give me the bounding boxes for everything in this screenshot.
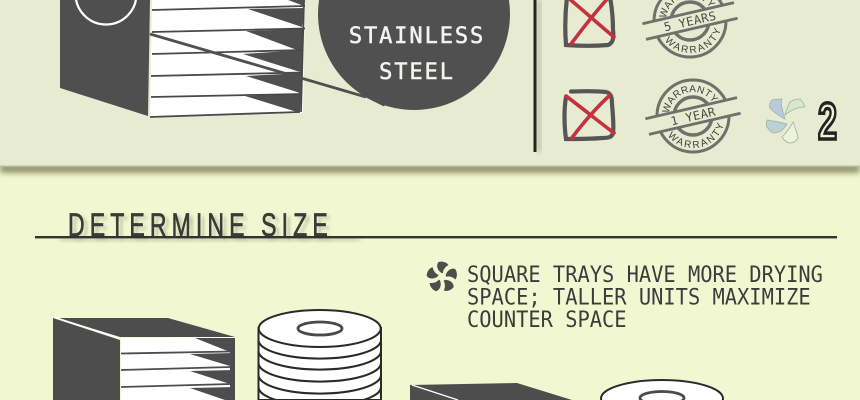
icon: warranty stamp 5 years [642,0,738,58]
icon: crossed checkbox, five year row [565,0,614,46]
icon: warranty stamp 5 years: WARRANTY [666,28,720,54]
heading: determine size [35,207,837,246]
icon: pastel fan [766,99,805,143]
icon: warranty stamp 1 year: 1 YEAR [669,104,717,128]
icon: short square dehydrator [410,383,572,400]
divider: vertical rule [534,0,541,152]
callout: aluminum vs stainless steel bubble: STAINLESS [349,24,485,49]
icon: tall round dehydrator [258,310,381,400]
icon: warranty stamp 1 year [645,78,741,154]
heading: determine size: DETERMINE SIZE [72,210,337,246]
text block: tray shape advice: SQUARE TRAYS HAVE MORE DRYING [467,262,823,288]
icon: warranty stamp 1 year: WARRANTY [668,122,723,148]
number: 2: 2 [818,93,837,151]
text block: tray shape advice [467,262,823,333]
icon: short round dehydrator [601,380,723,400]
icon: warranty stamp 5 years: 5 YEARS [663,9,718,34]
heading: determine size: DETERMINE SIZE [68,207,333,243]
icon: crossed checkbox, one year row [564,91,614,139]
text block: tray shape advice: COUNTER SPACE [467,307,627,333]
icon: tray dehydrator with round door [60,0,305,118]
icon: dark fan bullet [426,262,459,293]
text block: tray shape advice: SPACE; TALLER UNITS MAXIMIZE [467,285,811,311]
panel: material comparison [0,0,860,177]
callout: aluminum vs stainless steel bubble [150,0,510,110]
icon: warranty stamp 1 year: WARRANTY [662,85,718,112]
icon: tall square dehydrator [53,318,235,400]
callout: aluminum vs stainless steel bubble: STEEL [379,60,455,85]
